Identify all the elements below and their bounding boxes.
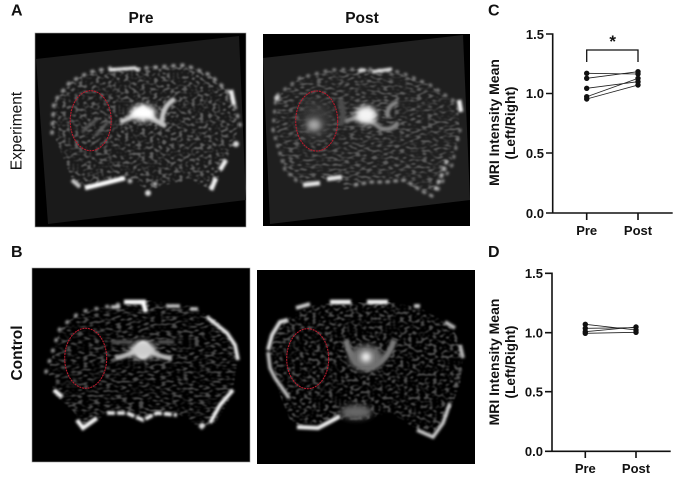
category labels: Pre	[575, 461, 596, 476]
row label: Experiment: Experiment	[8, 91, 26, 170]
axes	[546, 34, 673, 220]
significance star: *	[609, 32, 616, 51]
paired lines	[585, 324, 636, 333]
chart D: control paired plot	[486, 266, 671, 476]
category labels: Pre	[576, 223, 597, 238]
column heading: Pre: Pre	[128, 10, 154, 27]
paired lines	[587, 72, 638, 99]
category labels: Post	[624, 223, 653, 238]
region of interest	[296, 91, 338, 151]
panel A label: A	[11, 2, 23, 20]
category labels	[576, 223, 653, 238]
tick labels: 1.0	[526, 86, 544, 101]
tick labels: 1.5	[526, 27, 544, 42]
data points	[584, 69, 641, 102]
MRI scan: control pre	[32, 268, 250, 462]
data points	[583, 322, 639, 336]
panel B label: B	[11, 244, 23, 261]
category labels: Post	[622, 461, 651, 476]
y axis title line 2: (Left/Right)	[503, 326, 518, 398]
region of interest	[287, 329, 329, 389]
axes	[545, 273, 671, 458]
column heading: Post: Post	[345, 10, 379, 27]
region of interest	[65, 328, 107, 388]
tick labels	[526, 27, 544, 221]
tick labels	[525, 266, 543, 459]
significance bracket	[587, 50, 638, 62]
tick labels: 0.5	[526, 146, 544, 161]
tick labels: 0.0	[525, 444, 543, 459]
panel C label: C	[488, 2, 500, 20]
y axis title line 2: (Left/Right)	[503, 87, 518, 159]
row label: Control: Control	[9, 325, 26, 381]
MRI scan: experiment pre	[35, 33, 246, 227]
tick labels: 1.5	[525, 266, 543, 281]
y axis title line 1: MRI Intensity Mean	[486, 299, 502, 425]
region of interest	[70, 91, 111, 151]
tick labels: 0.5	[525, 384, 543, 400]
tick labels: 0.0	[526, 206, 544, 221]
chart C: experiment paired plot	[486, 27, 673, 238]
tick labels: 1.0	[525, 326, 543, 340]
MRI scan: experiment post	[263, 34, 470, 226]
MRI scan: control post	[257, 270, 475, 464]
panel D label: D	[488, 244, 500, 261]
category labels	[575, 461, 651, 476]
y axis title line 1: MRI Intensity Mean	[486, 59, 502, 186]
